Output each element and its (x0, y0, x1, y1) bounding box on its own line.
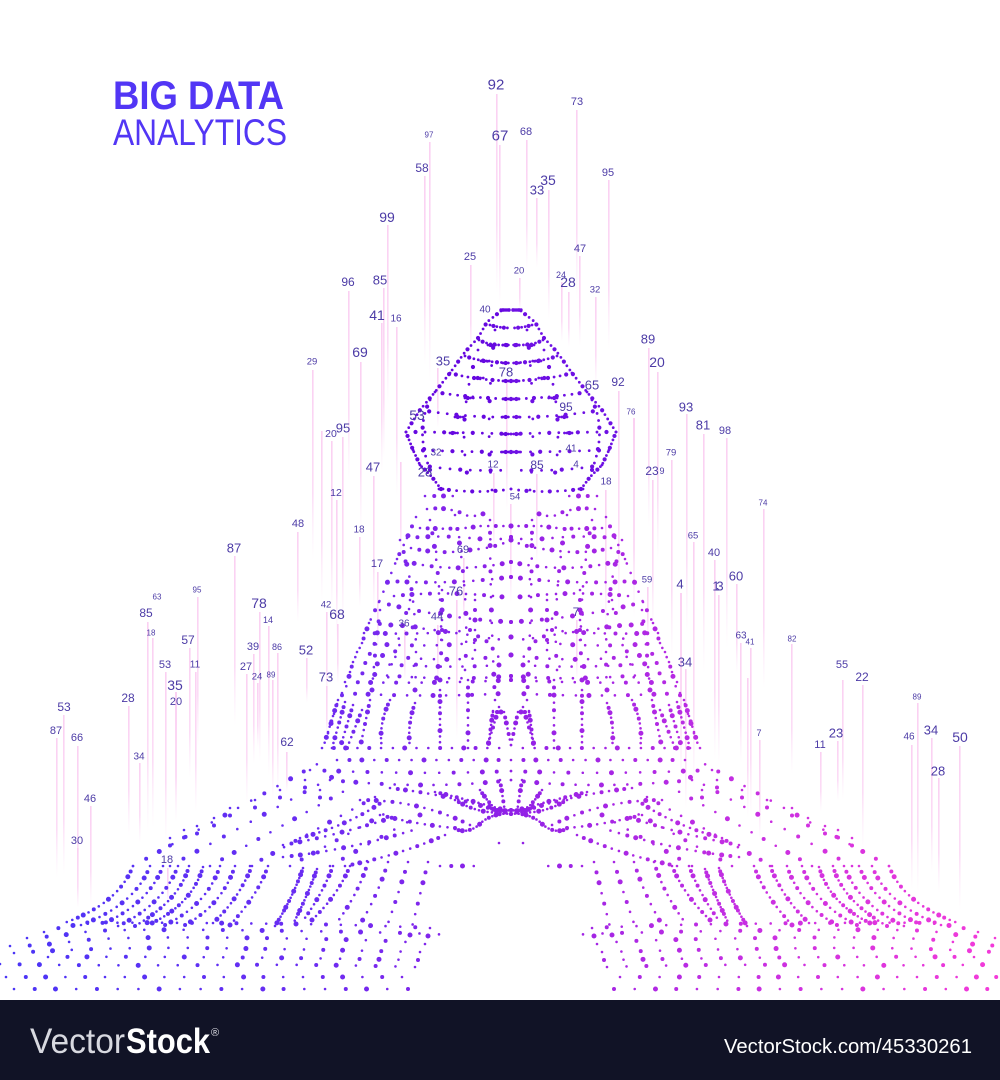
data value labels: 87 (50, 725, 62, 737)
data value labels: 53 (57, 700, 71, 714)
data value labels: 24 (252, 672, 262, 682)
data value labels: 60 (729, 568, 743, 584)
data value labels: 28 (560, 274, 576, 290)
data value labels: 11 (814, 739, 826, 751)
data value labels: 18 (600, 476, 612, 488)
data value labels: 1 (712, 578, 720, 594)
data value labels: 98 (719, 425, 731, 437)
data value labels: 62 (280, 735, 294, 749)
data value labels: 52 (299, 642, 313, 658)
data value labels: 40 (708, 547, 720, 559)
data value labels: 82 (788, 634, 797, 644)
data value labels: 96 (341, 275, 355, 289)
data value labels: 40 (479, 304, 491, 316)
data value labels: 20 (325, 428, 337, 440)
data value labels: 12 (487, 460, 499, 470)
data value labels: 63 (735, 630, 747, 642)
dome of tower, left half (406, 310, 511, 492)
data value labels: 47 (574, 243, 586, 255)
data value labels: 68 (329, 606, 345, 622)
data value labels: 35 (436, 354, 450, 368)
data value labels: 99 (379, 209, 395, 225)
title: BIG DATA (113, 74, 284, 118)
data value labels: 73 (571, 96, 583, 108)
data value labels: 76 (627, 408, 636, 416)
data value labels: 86 (272, 642, 282, 652)
data value labels: 9 (659, 466, 665, 476)
data value labels: 41 (746, 638, 755, 646)
data value labels: 89 (641, 332, 655, 346)
data value labels: 57 (181, 633, 195, 647)
data value labels: 32 (430, 448, 442, 458)
data value labels: 95 (559, 400, 573, 414)
data value labels: 4 (676, 576, 684, 592)
data value labels: 28 (931, 764, 945, 778)
data value labels: 46 (903, 732, 915, 742)
data value labels: 33 (530, 182, 544, 198)
data value labels: 14 (263, 615, 273, 625)
data value labels: 29 (307, 356, 317, 368)
data value labels: 32 (590, 284, 600, 296)
data value labels: 24 (556, 270, 566, 280)
data value labels: 35 (167, 677, 183, 693)
data value labels: 89 (913, 692, 922, 702)
pink data lines (56, 94, 961, 911)
data value labels: 74 (759, 498, 768, 508)
data value labels: 95 (336, 420, 350, 436)
footer bar (0, 1000, 1000, 1080)
data value labels: 73 (319, 670, 333, 684)
data value labels: 47 (366, 460, 380, 474)
data value labels: 23 (829, 726, 843, 740)
data value labels: 18 (353, 524, 365, 536)
data value labels: 78 (499, 364, 513, 380)
data value labels: 92 (488, 76, 504, 94)
data value labels: 46 (84, 793, 96, 805)
data value labels: 30 (71, 835, 83, 847)
data value labels: 65 (585, 378, 599, 392)
data value labels: 65 (688, 530, 698, 542)
data value labels: 79 (666, 448, 676, 458)
data value labels: 68 (520, 126, 532, 138)
data value labels: 36 (398, 618, 410, 630)
data value labels: 85 (373, 272, 387, 288)
data value labels: 42 (321, 600, 331, 610)
data value labels: 48 (292, 518, 304, 530)
data value labels: 23 (645, 464, 659, 478)
data value labels: 25 (464, 251, 476, 263)
data value labels: 20 (514, 266, 524, 276)
data value labels: 17 (371, 558, 383, 570)
data value labels: 22 (855, 670, 869, 684)
data value labels: 16 (390, 314, 402, 324)
data value labels: 93 (679, 400, 693, 414)
data value labels: 54 (510, 492, 520, 502)
data value labels: 58 (415, 161, 429, 175)
data value labels (50, 76, 968, 866)
data value labels: 53 (409, 407, 425, 423)
data value labels: 67 (492, 128, 508, 144)
data value labels: 7 (573, 605, 580, 619)
data value labels: 44 (431, 611, 443, 623)
data value labels: 12 (330, 487, 342, 499)
data value labels: 20 (170, 696, 182, 708)
data value labels: 92 (611, 375, 625, 389)
data value labels: 69 (352, 344, 368, 360)
data value labels: 20 (649, 354, 665, 370)
data value labels: 89 (267, 670, 276, 680)
dot field: floor and lower tower, left half (0, 496, 511, 989)
data value labels: 4 (573, 460, 579, 470)
data value labels: 59 (642, 574, 652, 586)
logo: Vector (30, 1022, 125, 1061)
data value labels: 95 (602, 167, 614, 179)
data value labels: 18 (147, 628, 156, 638)
image id: VectorStock.com/45330261 (724, 1036, 972, 1058)
data value labels: 11 (190, 660, 201, 670)
dot field: floor and lower tower, right half (511, 496, 1000, 989)
data value labels: 78 (251, 595, 267, 611)
title (113, 74, 287, 153)
data value labels: 39 (247, 641, 259, 653)
data value labels: 28 (121, 691, 135, 705)
data value labels: 55 (836, 659, 848, 671)
data value labels: 85 (530, 458, 544, 472)
data value labels: 41 (565, 444, 577, 454)
data value labels: 66 (71, 732, 83, 744)
data value labels: 97 (425, 130, 434, 140)
data value labels: 81 (696, 418, 710, 432)
data value labels: 18 (161, 854, 173, 866)
data value labels: 35 (540, 172, 556, 188)
logo: ® (211, 1027, 219, 1039)
data value labels: 53 (159, 659, 171, 671)
data value labels: 41 (369, 307, 385, 323)
title: ANALYTICS (113, 112, 287, 153)
dome of tower, right half (511, 310, 616, 492)
data value labels: 27 (240, 661, 252, 673)
data value labels: 76 (449, 584, 463, 598)
logo (30, 1022, 219, 1061)
data value labels: 34 (678, 654, 692, 670)
data value labels: 3 (716, 578, 724, 594)
data value labels: 63 (153, 592, 162, 602)
data value labels: 34 (924, 722, 938, 738)
data value labels: 28 (418, 464, 432, 480)
data value labels: 87 (227, 540, 241, 556)
logo: Stock (126, 1022, 210, 1061)
data value labels: 50 (952, 729, 968, 745)
data value labels: 85 (139, 606, 153, 620)
data value labels: 7 (756, 728, 762, 738)
data value labels: 34 (133, 752, 145, 762)
data value labels: 69 (457, 544, 469, 556)
data value labels: 95 (193, 586, 202, 594)
